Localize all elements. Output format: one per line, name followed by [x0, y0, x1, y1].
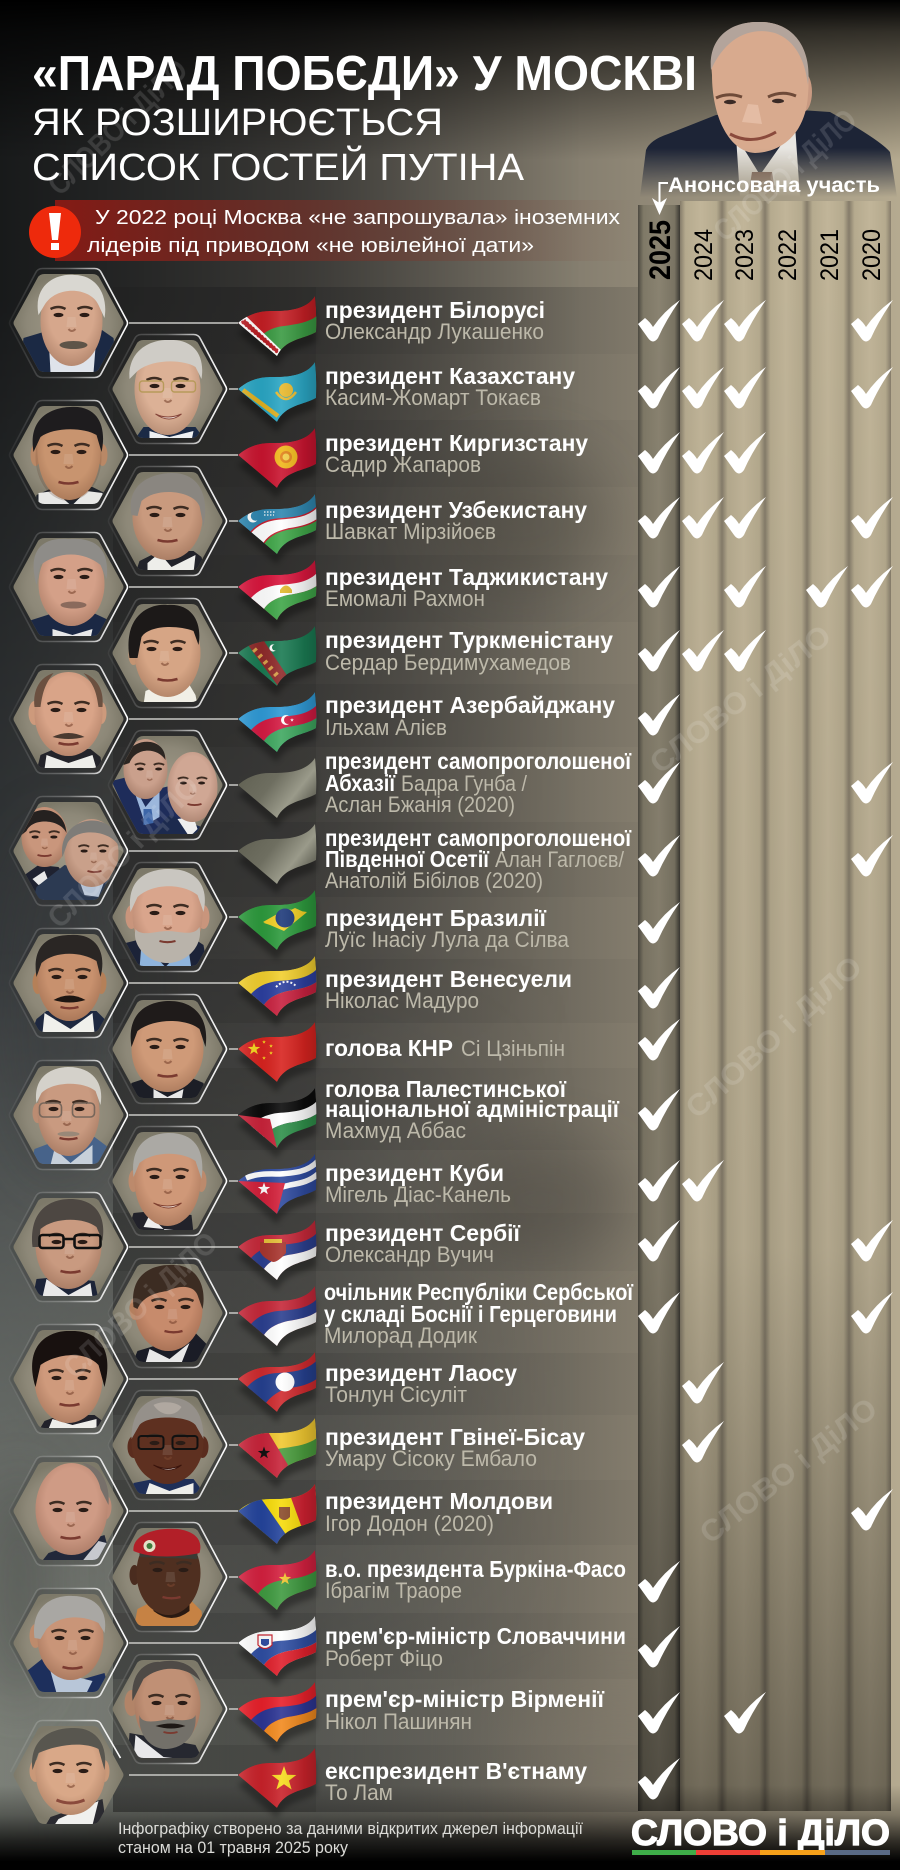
- callout: 2022 note: У 2022 році Москва «не запрошувала» іноземних: [95, 207, 620, 229]
- row: Slovakia: [10, 1588, 680, 1698]
- flag: Abkhazia placeholder: [238, 758, 316, 828]
- callout: 2022 note: [29, 200, 640, 261]
- row: Belarus: [10, 268, 893, 383]
- flag: Turkmenistan: [238, 626, 316, 696]
- text: Belarus: Олександр Лукашенко: [325, 319, 544, 344]
- row: South Ossetia: [10, 796, 893, 906]
- text: Tajikistan: президент Таджикистану: [325, 564, 608, 590]
- flag: Vietnam: [238, 1748, 316, 1818]
- column heading: Анонсована участь: [668, 174, 880, 197]
- portrait: Dodon: [10, 1456, 128, 1566]
- portrait: Xi Jinping: [108, 994, 226, 1104]
- flag: Moldova: [238, 1481, 320, 1554]
- text: Guinea-Bissau: Умару Сісоку Ембало: [325, 1446, 537, 1471]
- text: Moldova: [325, 1488, 553, 1536]
- text: Vietnam: [325, 1758, 587, 1805]
- text: Laos: [325, 1360, 517, 1407]
- checks: Burkina Faso: [638, 1561, 680, 1602]
- row: Abkhazia: [108, 730, 893, 840]
- portrait: Traore: [108, 1522, 226, 1632]
- text: Tajikistan: [325, 564, 608, 611]
- flag: Kazakhstan: [238, 362, 316, 432]
- text: Abkhazia: Бадра Гунба /: [401, 771, 528, 796]
- checks: Abkhazia: [638, 762, 893, 804]
- watermarks: СЛОВО і ДіЛО: [41, 52, 194, 202]
- row: Laos: [10, 1324, 724, 1434]
- flag: Serbia: [238, 1220, 318, 1290]
- checks: Guinea-Bissau: [682, 1421, 724, 1462]
- portrait: Gunba and Bzhania: [108, 730, 226, 840]
- checks: Cuba: [638, 1160, 724, 1202]
- flag: Cuba: [238, 1154, 318, 1224]
- flag: Burkina Faso: [238, 1550, 318, 1620]
- flag: Brazil: [238, 890, 316, 960]
- connector lines: [129, 323, 238, 1775]
- text: Belarus: [325, 297, 545, 344]
- text: China: голова КНР: [325, 1035, 453, 1061]
- text: South Ossetia: Південної Осетії: [325, 846, 489, 872]
- row: Palestine: [10, 1060, 680, 1170]
- row: Armenia: [108, 1654, 766, 1764]
- title: СПИСОК ГОСТЕЙ ПУТІНА: [32, 144, 525, 189]
- text: Kyrgyzstan: президент Киргизстану: [325, 430, 588, 456]
- text: Turkmenistan: [325, 627, 613, 675]
- watermarks: СЛОВО і ДіЛО: [678, 949, 869, 1125]
- checks: Kazakhstan: [638, 367, 893, 408]
- portrait: Berdimuhamedov: [108, 598, 226, 708]
- text: Brazil: [325, 905, 570, 952]
- text: Laos: президент Лаосу: [325, 1360, 517, 1386]
- row bands: [113, 287, 638, 1812]
- checks: Armenia: [638, 1692, 766, 1734]
- text: Cuba: президент Куби: [325, 1160, 504, 1186]
- checks: Venezuela: [638, 967, 680, 1008]
- text: Turkmenistan: Сердар Бердимухамедов: [325, 650, 571, 675]
- text: Kyrgyzstan: Садир Жапаров: [325, 452, 481, 477]
- row: Uzbekistan: [108, 466, 893, 576]
- portrait: Diaz-Canel: [108, 1126, 226, 1236]
- text: Armenia: Нікол Пашинян: [325, 1709, 472, 1734]
- row: Guinea-Bissau: [108, 1390, 724, 1500]
- flag: Palestine: [238, 1088, 318, 1158]
- text: Slovakia: прем'єр-міністр Словаччини: [325, 1623, 626, 1649]
- flag: China: [238, 1022, 316, 1092]
- row: Cuba: [108, 1126, 724, 1236]
- flag: Laos: [238, 1352, 318, 1422]
- flag: Tajikistan: [238, 560, 318, 630]
- checks: Slovakia: [638, 1626, 680, 1668]
- text: Republika Srpska: очільник Республіки Сербської: [324, 1279, 633, 1305]
- portrait: Rahmon: [10, 532, 128, 642]
- watermarks: СЛОВО і ДіЛО: [643, 617, 838, 781]
- logo: Слово і Діло: СЛОВО і ДіЛО: [631, 1812, 890, 1853]
- row: Kyrgyzstan: [10, 400, 766, 510]
- text: Slovakia: Роберт Фіцо: [325, 1646, 443, 1671]
- text: Armenia: прем'єр-міністр Вірменії: [325, 1686, 605, 1712]
- checks: Republika Srpska: [638, 1292, 893, 1334]
- text: Republika Srpska: [324, 1279, 633, 1348]
- row: Vietnam: [10, 1720, 680, 1827]
- text: South Ossetia: Алан Гаглоєв/: [495, 847, 625, 872]
- checks: South Ossetia: [638, 835, 893, 876]
- year columns: [638, 201, 891, 1811]
- text: Kyrgyzstan: [325, 430, 588, 477]
- text: Venezuela: [325, 966, 572, 1013]
- text: Moldova: президент Молдови: [325, 1488, 553, 1514]
- flag: Venezuela: [238, 956, 318, 1026]
- portrait: To Lam: [10, 1720, 124, 1827]
- text: Brazil: президент Бразилії: [325, 905, 547, 931]
- row: Republika Srpska: [108, 1258, 893, 1368]
- text: Republika Srpska: у складі Боснії і Герцеговини: [324, 1301, 617, 1327]
- text: Brazil: Луїс Інасіу Лула да Сілва: [325, 927, 570, 952]
- checks: Kyrgyzstan: [638, 432, 766, 474]
- flag: Kyrgyzstan: [238, 428, 316, 498]
- callout: 2022 note: лідерів під приводом «не ювілейної дати»: [87, 235, 534, 257]
- text: Uzbekistan: президент Узбекистану: [325, 497, 587, 523]
- row: Turkmenistan: [108, 598, 766, 708]
- row: Azerbaijan: [10, 664, 680, 774]
- checks: Brazil: [638, 902, 680, 944]
- text: Azerbaijan: президент Азербайджану: [325, 692, 615, 718]
- text: Palestine: національної адміністрації: [325, 1096, 620, 1122]
- portrait: Pashinyan: [108, 1654, 226, 1764]
- checks: Tajikistan: [638, 566, 893, 608]
- year labels: 2023: [731, 229, 759, 281]
- portrait: Vucic: [10, 1192, 128, 1302]
- watermarks: СЛОВО і ДіЛО: [40, 769, 206, 935]
- text: Venezuela: президент Венесуели: [325, 966, 572, 992]
- checks: Turkmenistan: [638, 630, 766, 672]
- flag: South Ossetia placeholder: [238, 824, 316, 894]
- text: South Ossetia: Анатолій Бібілов (2020): [325, 868, 543, 893]
- year labels: 2022: [774, 229, 802, 281]
- text: Uzbekistan: Шавкат Мірзійоєв: [325, 519, 496, 544]
- checks: Belarus: [638, 300, 893, 342]
- title: «ПАРАД ПОБЄДИ» У МОСКВІ: [32, 47, 697, 101]
- text: South Ossetia: [325, 825, 631, 893]
- footer source note: [118, 1819, 583, 1857]
- text: Guinea-Bissau: [325, 1424, 585, 1471]
- portrait: Lula: [108, 862, 226, 972]
- text: Abkhazia: президент самопроголошеної: [325, 748, 631, 774]
- year labels: 2020: [858, 229, 886, 281]
- row: Burkina Faso: [108, 1522, 680, 1632]
- text: Azerbaijan: Ільхам Алієв: [325, 715, 447, 740]
- portrait: Embalo: [108, 1390, 226, 1500]
- flag: Azerbaijan: [238, 692, 318, 762]
- text: Uzbekistan: [325, 497, 587, 544]
- column heading: [652, 174, 880, 215]
- flag: Belarus: [236, 296, 318, 366]
- portrait: Dodik: [108, 1258, 226, 1368]
- text: Slovakia: [325, 1623, 626, 1671]
- flag: Guinea-Bissau: [238, 1418, 318, 1488]
- portrait: Vladimir Putin: [640, 22, 897, 197]
- text: South Ossetia: президент самопроголошеної: [325, 825, 631, 851]
- flag: Uzbekistan: [238, 494, 318, 564]
- row: Brazil: [108, 862, 680, 972]
- year labels: [644, 220, 886, 281]
- watermarks: [40, 52, 884, 1551]
- footer source note: станом на 01 травня 2025 року: [118, 1838, 348, 1857]
- portrait: Japarov: [10, 400, 128, 510]
- text: Burkina Faso: [325, 1556, 626, 1603]
- text: Turkmenistan: президент Туркменістану: [325, 627, 613, 653]
- row: Tajikistan: [10, 532, 893, 642]
- text: Palestine: Махмуд Аббас: [325, 1118, 466, 1143]
- text: Burkina Faso: Ібрагім Траоре: [325, 1578, 462, 1603]
- text: Republika Srpska: Милорад Додик: [324, 1323, 477, 1348]
- portrait: Maduro: [10, 928, 128, 1038]
- text: Kazakhstan: президент Казахстану: [325, 363, 575, 389]
- checks: Azerbaijan: [638, 694, 680, 736]
- title: ЯК РОЗШИРЮЄТЬСЯ: [32, 102, 443, 144]
- checks: Serbia: [638, 1220, 893, 1262]
- checks: Laos: [682, 1362, 724, 1404]
- year labels: 2021: [816, 229, 844, 281]
- text: Serbia: президент Сербії: [325, 1220, 521, 1246]
- portrait: Lukashenko: [10, 268, 128, 383]
- text: Venezuela: Ніколас Мадуро: [325, 988, 479, 1013]
- text: Serbia: [325, 1220, 521, 1267]
- portrait: Mirziyoyev: [108, 466, 226, 576]
- text: China: [325, 1035, 565, 1061]
- title: [32, 47, 697, 189]
- text: Belarus: президент Білорусі: [325, 297, 545, 323]
- text: Moldova: Ігор Додон (2020): [325, 1511, 494, 1536]
- text: Tajikistan: Емомалі Рахмон: [325, 586, 485, 611]
- footer source note: Інфографіку створено за даними відкритих джерел інформації: [118, 1819, 583, 1838]
- flag: Slovenia: [238, 1616, 318, 1686]
- text: Serbia: Олександр Вучич: [325, 1242, 494, 1267]
- text: Vietnam: експрезидент В'єтнаму: [325, 1758, 587, 1784]
- checks: Vietnam: [638, 1758, 680, 1800]
- checks: China: [638, 1019, 680, 1060]
- row: Venezuela: [10, 928, 680, 1038]
- portrait: Thongloun: [10, 1324, 128, 1434]
- watermarks: СЛОВО і ДіЛО: [693, 1391, 884, 1551]
- text: China: Сі Цзіньпін: [461, 1036, 565, 1061]
- flag: Republika Srpska: [238, 1286, 318, 1356]
- text: Burkina Faso: в.о. президента Буркіна-Фасо: [325, 1556, 626, 1582]
- portrait: Tokayev: [108, 334, 226, 444]
- portrait: Gagloev and Bibilov: [10, 796, 128, 906]
- checks: Palestine: [638, 1089, 680, 1130]
- text: Laos: Тонлун Сісуліт: [325, 1382, 467, 1407]
- row: Kazakhstan: [108, 334, 893, 444]
- year labels: 2024: [690, 229, 718, 281]
- text: Guinea-Bissau: президент Гвінеї-Бісау: [325, 1424, 585, 1450]
- text: Cuba: [325, 1160, 511, 1207]
- flag: Armenia: [238, 1682, 318, 1752]
- row: Serbia: [10, 1192, 893, 1302]
- year labels: 2025: [644, 220, 677, 280]
- checks: Moldova: [851, 1489, 893, 1530]
- text: Armenia: [325, 1686, 605, 1734]
- text: Kazakhstan: [325, 363, 575, 410]
- text: Azerbaijan: [325, 692, 615, 740]
- portrait: Abbas: [10, 1060, 128, 1170]
- row: China: [108, 994, 680, 1104]
- text: Abkhazia: Аслан Бжанія (2020): [325, 792, 515, 817]
- watermarks: СЛОВО і ДіЛО: [56, 1224, 225, 1385]
- text: Abkhazia: Абхазії: [325, 770, 395, 796]
- text: Palestine: [325, 1076, 620, 1143]
- watermarks: СЛОВО і ДіЛО: [706, 102, 863, 248]
- portrait: Aliyev: [10, 664, 128, 774]
- text: Vietnam: То Лам: [325, 1780, 393, 1805]
- checks: Uzbekistan: [638, 497, 893, 538]
- text: Palestine: голова Палестинської: [325, 1076, 567, 1102]
- row: Moldova: [10, 1456, 893, 1566]
- text: Kazakhstan: Касим-Жомарт Токаєв: [325, 385, 541, 410]
- text: Abkhazia: [325, 748, 631, 817]
- portrait: Fico: [10, 1588, 128, 1698]
- text: Cuba: Мігель Діас-Канель: [325, 1182, 511, 1207]
